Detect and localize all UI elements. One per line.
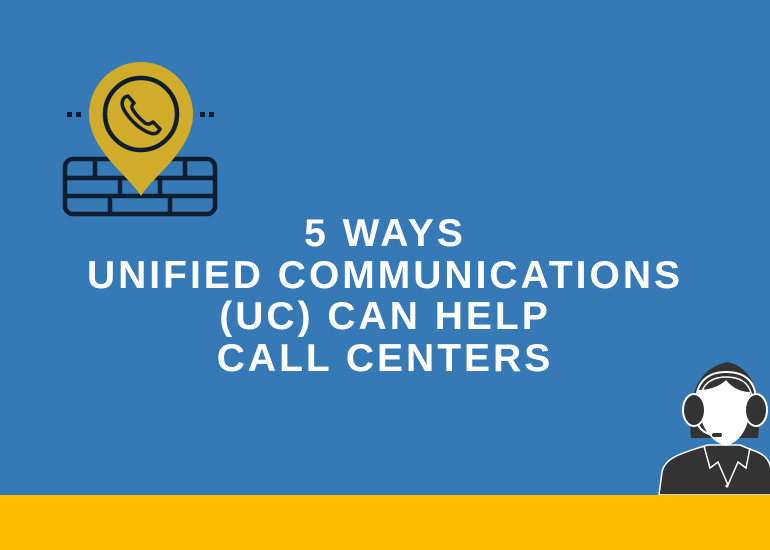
title (87, 212, 683, 380)
title: CALL CENTERS (217, 336, 553, 380)
title: 5 WAYS (304, 212, 466, 255)
yellow footer bar (0, 495, 770, 550)
icon: call center agent (658, 362, 770, 495)
icon: location pin on keyboard (62, 62, 218, 216)
title: (UC) CAN HELP (219, 295, 551, 338)
title: UNIFIED COMMUNICATIONS (87, 254, 683, 296)
